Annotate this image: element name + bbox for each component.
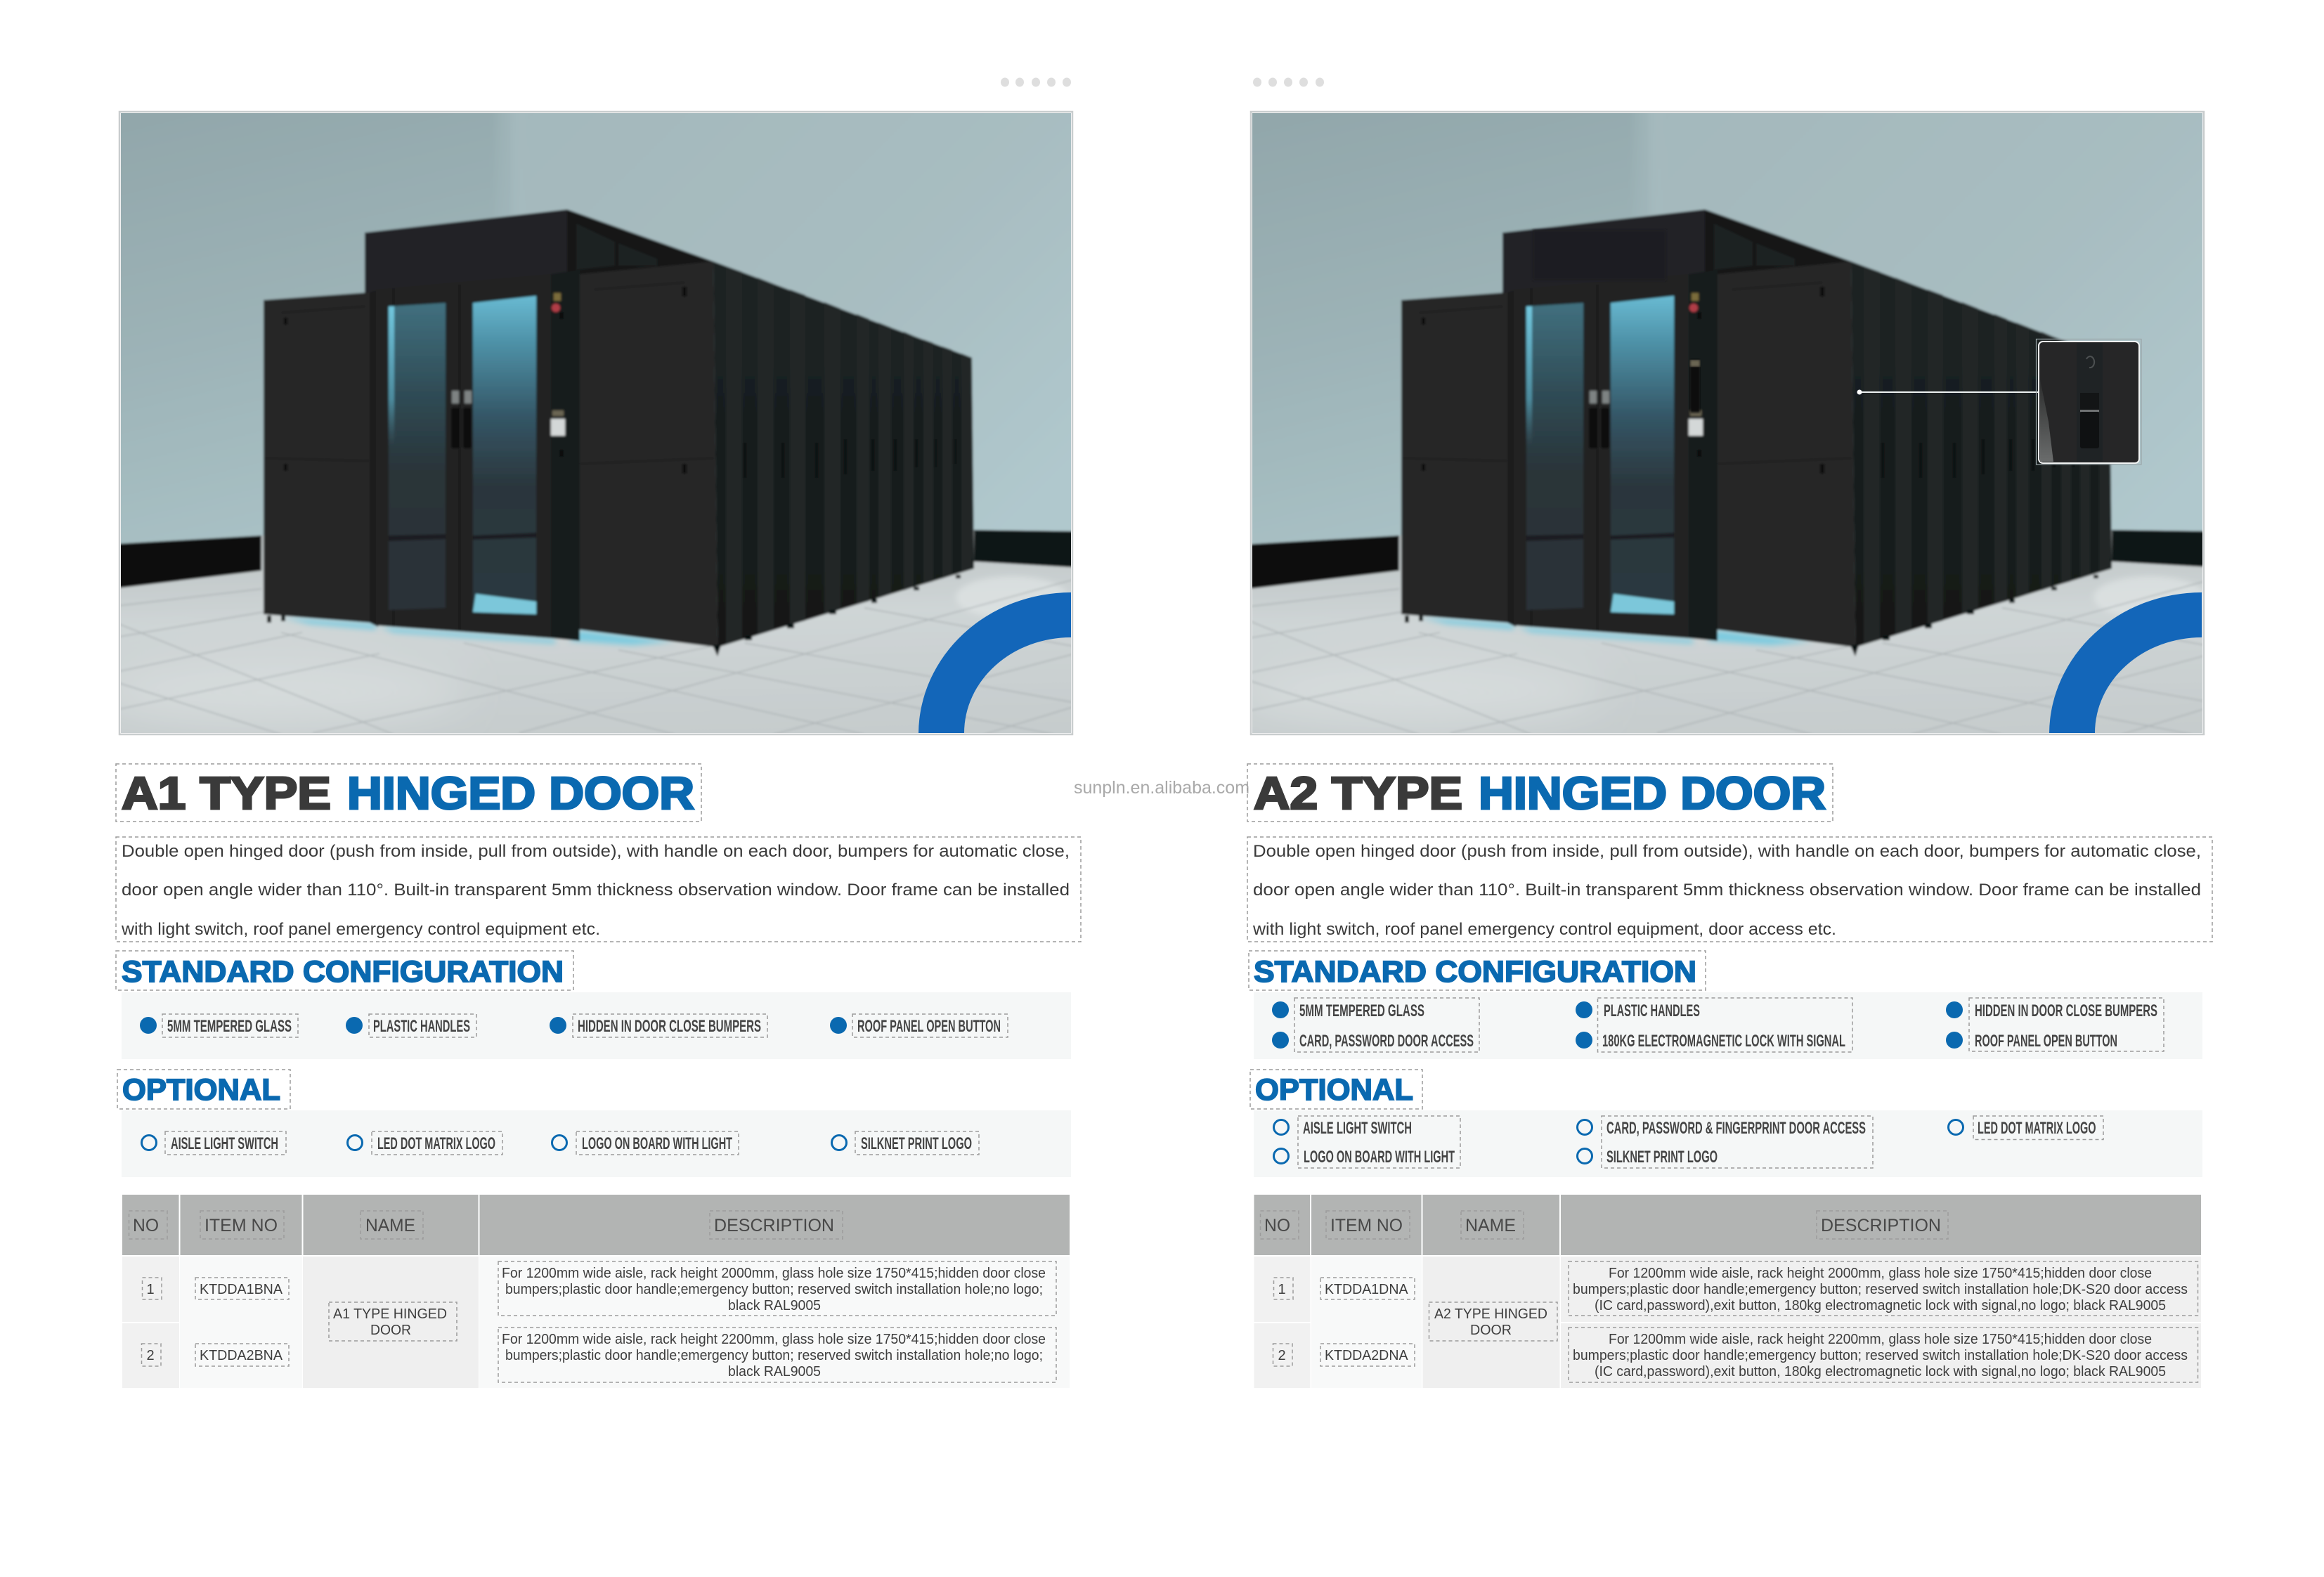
specification table A1: bumpers;plastic door handle;emergency button; reserved switch installation hole;no logo; [505, 1348, 1043, 1363]
title A2: A2 TYPE [1254, 767, 1462, 819]
specification table A2: A2 TYPE HINGED [1434, 1306, 1547, 1322]
specification table A1: KTDDA2BNA [200, 1348, 283, 1363]
specification table A1 [122, 1195, 1070, 1388]
description text A1: with light switch, roof panel emergency control equipment etc. [121, 920, 600, 939]
heading: standard configuration A2: STANDARD CONFIGURATION [1254, 955, 1696, 989]
standard items A2: CARD, PASSWORD DOOR ACCESS [1299, 1032, 1474, 1051]
description text A2: door open angle wider than 110°. Built-in transparent 5mm thickness observation window. Door frame can be installed [1253, 881, 2201, 900]
specification table A1: A1 TYPE HINGED [333, 1306, 447, 1322]
title A1: A1 TYPE [122, 767, 331, 819]
title A2: HINGED DOOR [1479, 767, 1826, 819]
specification table A2: NAME [1465, 1216, 1516, 1235]
optional items A2 [1254, 1110, 2202, 1177]
optional items A1: SILKNET PRINT LOGO [861, 1134, 972, 1153]
heading: optional A1: OPTIONAL [122, 1073, 280, 1107]
product image: A2 aisle containment [1249, 111, 2205, 735]
title A2 [1247, 764, 1833, 822]
optional items A1: LED DOT MATRIX LOGO [377, 1134, 495, 1153]
description text A1 [116, 837, 1081, 942]
specification table A2: KTDDA1DNA [1325, 1282, 1408, 1297]
heading: standard configuration A1: STANDARD CONFIGURATION [122, 955, 564, 989]
description text A1: door open angle wider than 110°. Built-in transparent 5mm thickness observation window. Door frame can be installed [122, 881, 1070, 900]
specification table A2: (IC card,password),exit button, 180kg electromagnetic lock with signal,no logo; black RAL9005 [1595, 1298, 2166, 1313]
optional items A1 [122, 1110, 1071, 1177]
heading: optional A2: OPTIONAL [1255, 1073, 1413, 1107]
description text A1: Double open hinged door (push from inside, pull from outside), with handle on each door, bumpers for automatic close, [122, 842, 1070, 861]
standard items A1: HIDDEN IN DOOR CLOSE BUMPERS [578, 1017, 761, 1036]
specification table A1: For 1200mm wide aisle, rack height 2200mm, glass hole size 1750*415;hidden door close [502, 1332, 1046, 1347]
specification table A1: ITEM NO [205, 1216, 278, 1235]
optional items A2: AISLE LIGHT SWITCH [1303, 1119, 1412, 1138]
standard items A2: PLASTIC HANDLES [1604, 1001, 1700, 1020]
specification table A2: For 1200mm wide aisle, rack height 2200mm, glass hole size 1750*415;hidden door close [1609, 1332, 2152, 1347]
standard items A2: HIDDEN IN DOOR CLOSE BUMPERS [1975, 1001, 2157, 1020]
panel: A1 type hinged door [42, 77, 1082, 1388]
specification table A2: 1 [1278, 1282, 1286, 1297]
specification table A2: For 1200mm wide aisle, rack height 2000mm, glass hole size 1750*415;hidden door close [1609, 1266, 2152, 1281]
standard items A1: PLASTIC HANDLES [373, 1017, 470, 1036]
specification table A1: black RAL9005 [728, 1298, 821, 1313]
title A1 [116, 764, 701, 822]
pagination dots A1 [1001, 77, 1071, 87]
standard items A1: 5MM TEMPERED GLASS [167, 1017, 292, 1036]
optional items A2: LED DOT MATRIX LOGO [1978, 1119, 2096, 1138]
specification table A1: 1 [146, 1282, 155, 1297]
pagination dots A2 [1253, 77, 1324, 87]
watermark: sunpln.en.alibaba.com [1074, 778, 1249, 798]
standard items A2 [1254, 992, 2202, 1059]
callout: door access detail [1857, 339, 2141, 465]
specification table A1: NO [133, 1216, 159, 1235]
specification table A1: bumpers;plastic door handle;emergency button; reserved switch installation hole;no logo; [505, 1282, 1043, 1297]
standard items A2: ROOF PANEL OPEN BUTTON [1975, 1032, 2117, 1051]
standard items A1: ROOF PANEL OPEN BUTTON [857, 1017, 1001, 1036]
optional items A2: LOGO ON BOARD WITH LIGHT [1304, 1148, 1455, 1167]
specification table A1: black RAL9005 [728, 1364, 821, 1380]
specification table A2: ITEM NO [1330, 1216, 1403, 1235]
optional items A1: LOGO ON BOARD WITH LIGHT [582, 1134, 732, 1153]
specification table A1: For 1200mm wide aisle, rack height 2000mm, glass hole size 1750*415;hidden door close [502, 1266, 1046, 1281]
specification table A2: DOOR [1470, 1323, 1512, 1338]
optional items A2: CARD, PASSWORD & FINGERPRINT DOOR ACCESS [1606, 1119, 1866, 1138]
specification table A2: 2 [1278, 1348, 1286, 1363]
optional items A2: SILKNET PRINT LOGO [1606, 1148, 1718, 1167]
specification table A2: DESCRIPTION [1821, 1216, 1941, 1235]
description text A2: with light switch, roof panel emergency control equipment, door access etc. [1252, 920, 1836, 939]
specification table A2: KTDDA2DNA [1325, 1348, 1408, 1363]
specification table A2: bumpers;plastic door handle;emergency button; reserved switch installation hole;DK-S20 door access [1573, 1348, 2188, 1363]
specification table A2: NO [1264, 1216, 1290, 1235]
specification table A1: DESCRIPTION [714, 1216, 834, 1235]
standard items A2: 180KG ELECTROMAGNETIC LOCK WITH SIGNAL [1602, 1032, 1845, 1051]
description text A2: Double open hinged door (push from inside, pull from outside), with handle on each door, bumpers for automatic close, [1253, 842, 2201, 861]
standard items A1 [122, 992, 1071, 1059]
specification table A1: KTDDA1BNA [200, 1282, 283, 1297]
standard items A2: 5MM TEMPERED GLASS [1299, 1001, 1424, 1020]
title A1: HINGED DOOR [347, 767, 694, 819]
specification table A2: (IC card,password),exit button, 180kg electromagnetic lock with signal,no logo; black RAL9005 [1595, 1364, 2166, 1380]
optional items A1: AISLE LIGHT SWITCH [171, 1134, 278, 1153]
description text A2 [1247, 837, 2212, 942]
specification table A2 [1254, 1195, 2201, 1388]
specification table A1: NAME [365, 1216, 415, 1235]
panel: A2 type hinged door [1180, 77, 2220, 1388]
specification table A2: bumpers;plastic door handle;emergency button; reserved switch installation hole;DK-S20 door access [1573, 1282, 2188, 1297]
specification table A1: DOOR [370, 1323, 411, 1338]
specification table A1: 2 [146, 1348, 155, 1363]
product image: A1 aisle containment [118, 111, 1074, 735]
